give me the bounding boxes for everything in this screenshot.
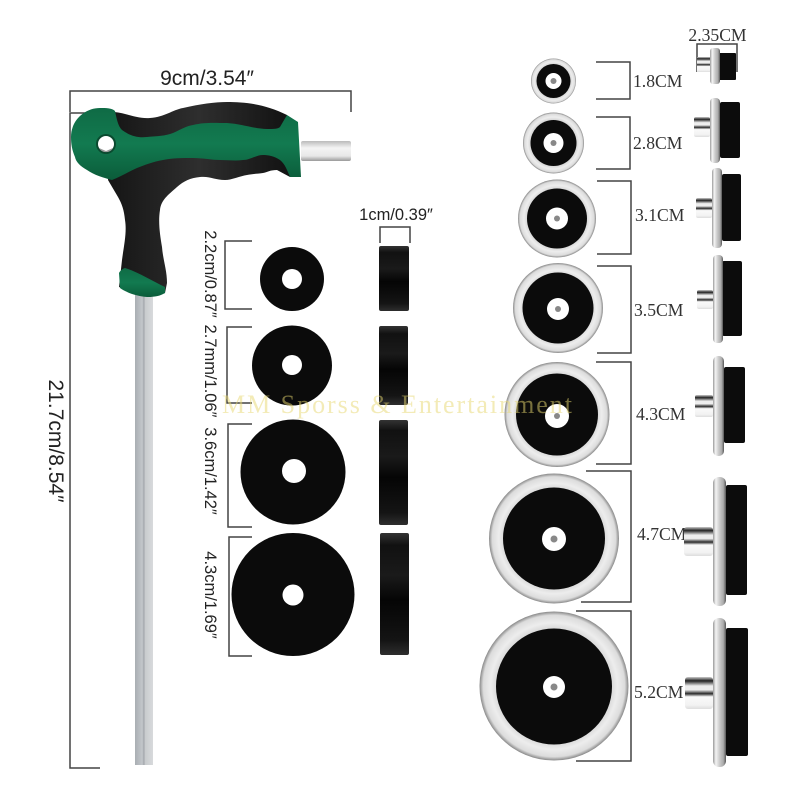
washer 2.7cm: [201, 325, 332, 418]
adapter side 2: [694, 98, 740, 163]
panel: metal adapter front views: [480, 58, 687, 761]
washer 3.6cm: 3.6cm/1.42″: [201, 427, 219, 515]
adapter side 4: [697, 255, 742, 343]
adapter 5.2CM: 5.2CM: [634, 682, 684, 702]
adapter 5.2CM: [480, 611, 684, 761]
washer 4.3cm: 4.3cm/1.69″: [201, 551, 219, 639]
washer 2.7cm: 2.7mm/1.06″: [201, 325, 219, 418]
washer 4.3cm: [201, 533, 354, 656]
adapter 4.3CM: 4.3CM: [636, 404, 686, 424]
adapter side 1: [697, 48, 736, 84]
washer 2.2cm: [201, 230, 324, 318]
dimension: handle width: 9cm/3.54″: [160, 67, 254, 90]
adapter side 3: [696, 168, 741, 248]
icon: hang hole: [96, 134, 116, 154]
adapter 4.3CM: [504, 362, 686, 467]
adapter 4.7CM: [489, 471, 687, 604]
panel: rubber washer front views: [201, 230, 354, 656]
adapter 1.8CM: [531, 58, 683, 104]
dimension: tool height: [44, 113, 110, 768]
dimension: adapter depth 2.35CM: 2.35CM: [688, 25, 747, 45]
adapter 2.8CM: 2.8CM: [633, 133, 683, 153]
adapter side 6: [684, 477, 747, 606]
dimension: tool height: 21.7cm/8.54″: [44, 379, 67, 503]
adapter 3.1CM: [518, 180, 685, 258]
dimension: washer thickness: 1cm/0.39″: [359, 206, 433, 224]
adapter side 7: [685, 618, 748, 767]
adapter side 5: [695, 356, 745, 456]
dimension: handle width: [70, 67, 351, 112]
adapter 1.8CM: 1.8CM: [633, 71, 683, 91]
dimension: adapter depth 2.35CM: [688, 25, 747, 72]
watermark: MM Sporss & Entertainment: [222, 390, 573, 419]
panel: metal adapter side views: [684, 25, 748, 767]
panel: rubber washer side views: [359, 206, 433, 655]
dimension: washer thickness: [359, 206, 433, 243]
adapter 2.8CM: [523, 112, 683, 174]
adapter 4.7CM: 4.7CM: [637, 524, 687, 544]
adapter 3.5CM: [513, 263, 684, 353]
icon: T-handle hex wrench: [71, 102, 351, 765]
washer 2.2cm: 2.2cm/0.87″: [201, 230, 219, 318]
adapter 3.1CM: 3.1CM: [635, 205, 685, 225]
washer 3.6cm: [201, 420, 346, 527]
adapter 3.5CM: 3.5CM: [634, 300, 684, 320]
